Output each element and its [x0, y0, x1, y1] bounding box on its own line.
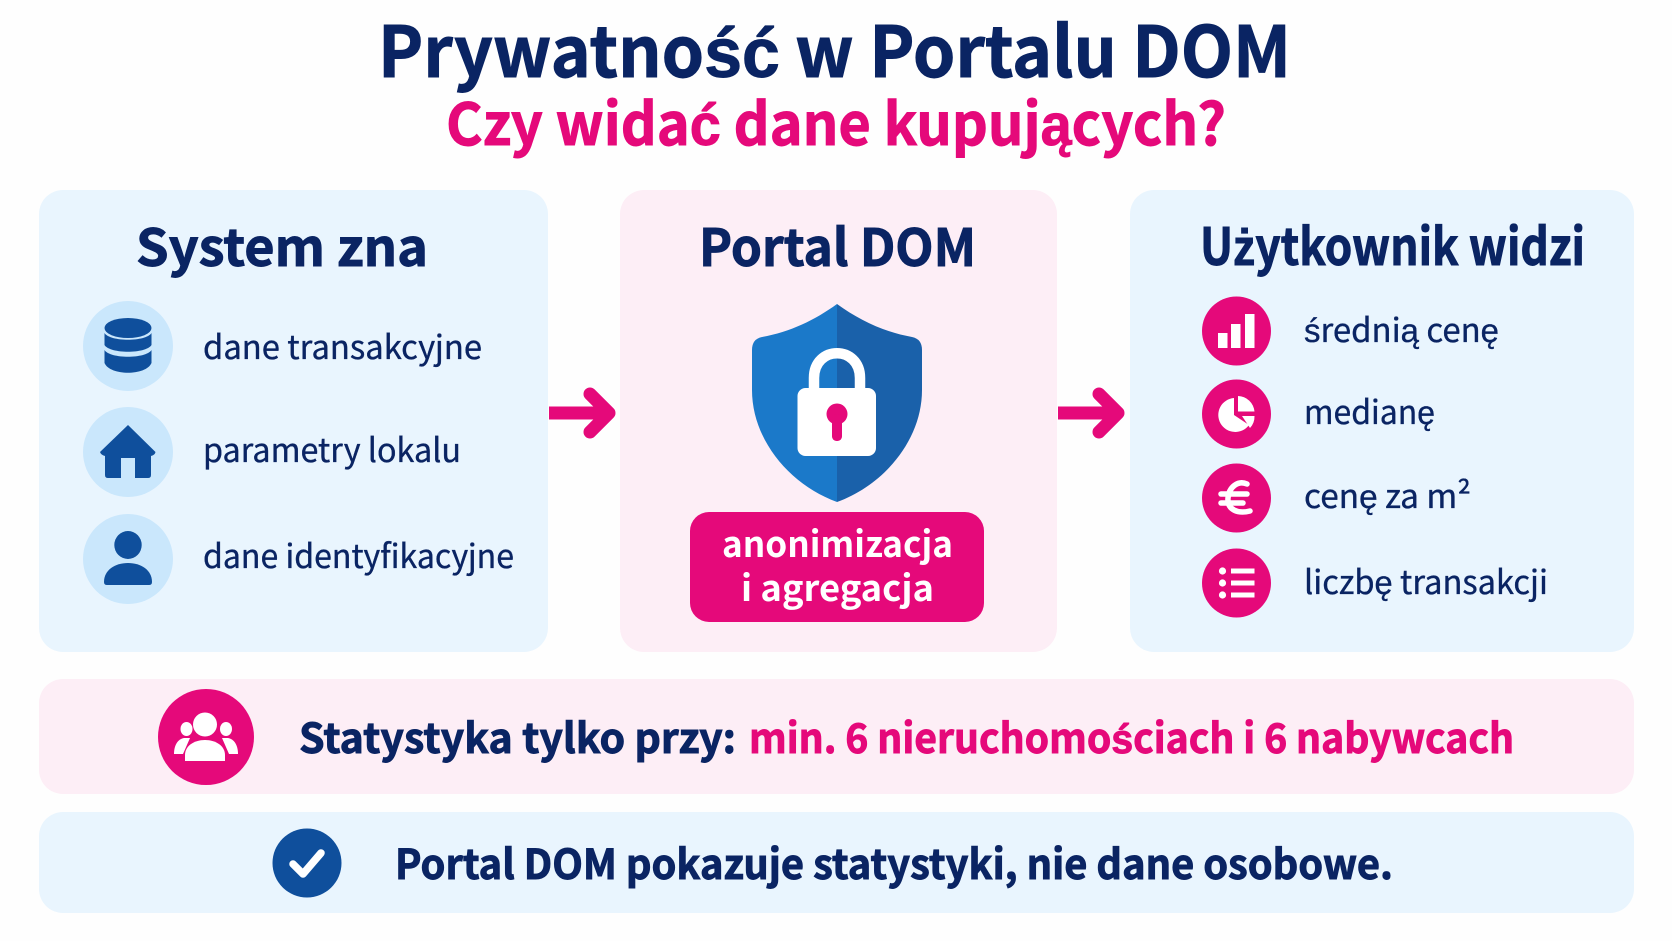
item: liczbę transakcji: liczbę transakcji: [1304, 556, 1548, 604]
item: liczbę transakcji: [1202, 548, 1548, 618]
item: medianę: [1202, 380, 1435, 448]
icon: shield with lock: [752, 304, 922, 502]
icon: euro: [1221, 483, 1250, 512]
banner: conclusion: Portal DOM pokazuje statystyki, nie dane osobowe.: [395, 831, 1393, 891]
panel: system zna: [39, 190, 548, 652]
item: medianę: medianę: [1304, 386, 1435, 434]
icon: check mark: [293, 853, 321, 874]
item: cenę za m²: [1202, 464, 1471, 532]
icon: list: [1219, 567, 1254, 599]
badge: anonimizacja i agregacja: anonimizacja: [722, 516, 953, 568]
item: dane transakcyjne: [83, 301, 482, 391]
icon: group of people: [174, 712, 238, 761]
item: dane identyfikacyjne: dane identyfikacyjne: [203, 530, 514, 578]
banner: threshold statistic: min. 6 nieruchomościach i 6 nabywcach: [749, 705, 1514, 765]
banner: threshold statistic: Statystyka tylko przy:: [299, 705, 736, 765]
heading: system zna: System zna: [136, 207, 428, 281]
heading: użytkownik widzi: Użytkownik widzi: [1200, 206, 1585, 280]
icon: pie chart: [1218, 396, 1255, 432]
item: średnią cenę: [1202, 296, 1499, 366]
heading: portal dom: Portal DOM: [699, 207, 976, 281]
icon: database: [104, 318, 152, 373]
banner: conclusion: [39, 812, 1634, 913]
banner: threshold statistic: [39, 679, 1634, 794]
icon: house: [100, 425, 156, 478]
badge: anonimizacja i agregacja: [690, 512, 984, 622]
arrow: portal to user: [1058, 394, 1118, 432]
item: średnią cenę: średnią cenę: [1304, 304, 1499, 352]
panel: użytkownik widzi: [1130, 190, 1634, 652]
badge: anonimizacja i agregacja: i agregacja: [741, 560, 934, 612]
item: parametry lokalu: [83, 407, 461, 497]
icon: bar chart: [1218, 314, 1254, 348]
item: dane identyfikacyjne: [83, 514, 514, 604]
icon: person: [104, 531, 152, 585]
item: parametry lokalu: parametry lokalu: [203, 424, 461, 472]
item: cenę za m²: cenę za m²: [1304, 470, 1471, 518]
panel: portal dom: [620, 190, 1057, 652]
arrow: system to portal: [549, 394, 609, 432]
subtitle: Czy widać dane kupujących?: [446, 78, 1226, 162]
title: Prywatność w Portalu DOM: [378, 0, 1291, 98]
item: dane transakcyjne: dane transakcyjne: [203, 321, 482, 369]
